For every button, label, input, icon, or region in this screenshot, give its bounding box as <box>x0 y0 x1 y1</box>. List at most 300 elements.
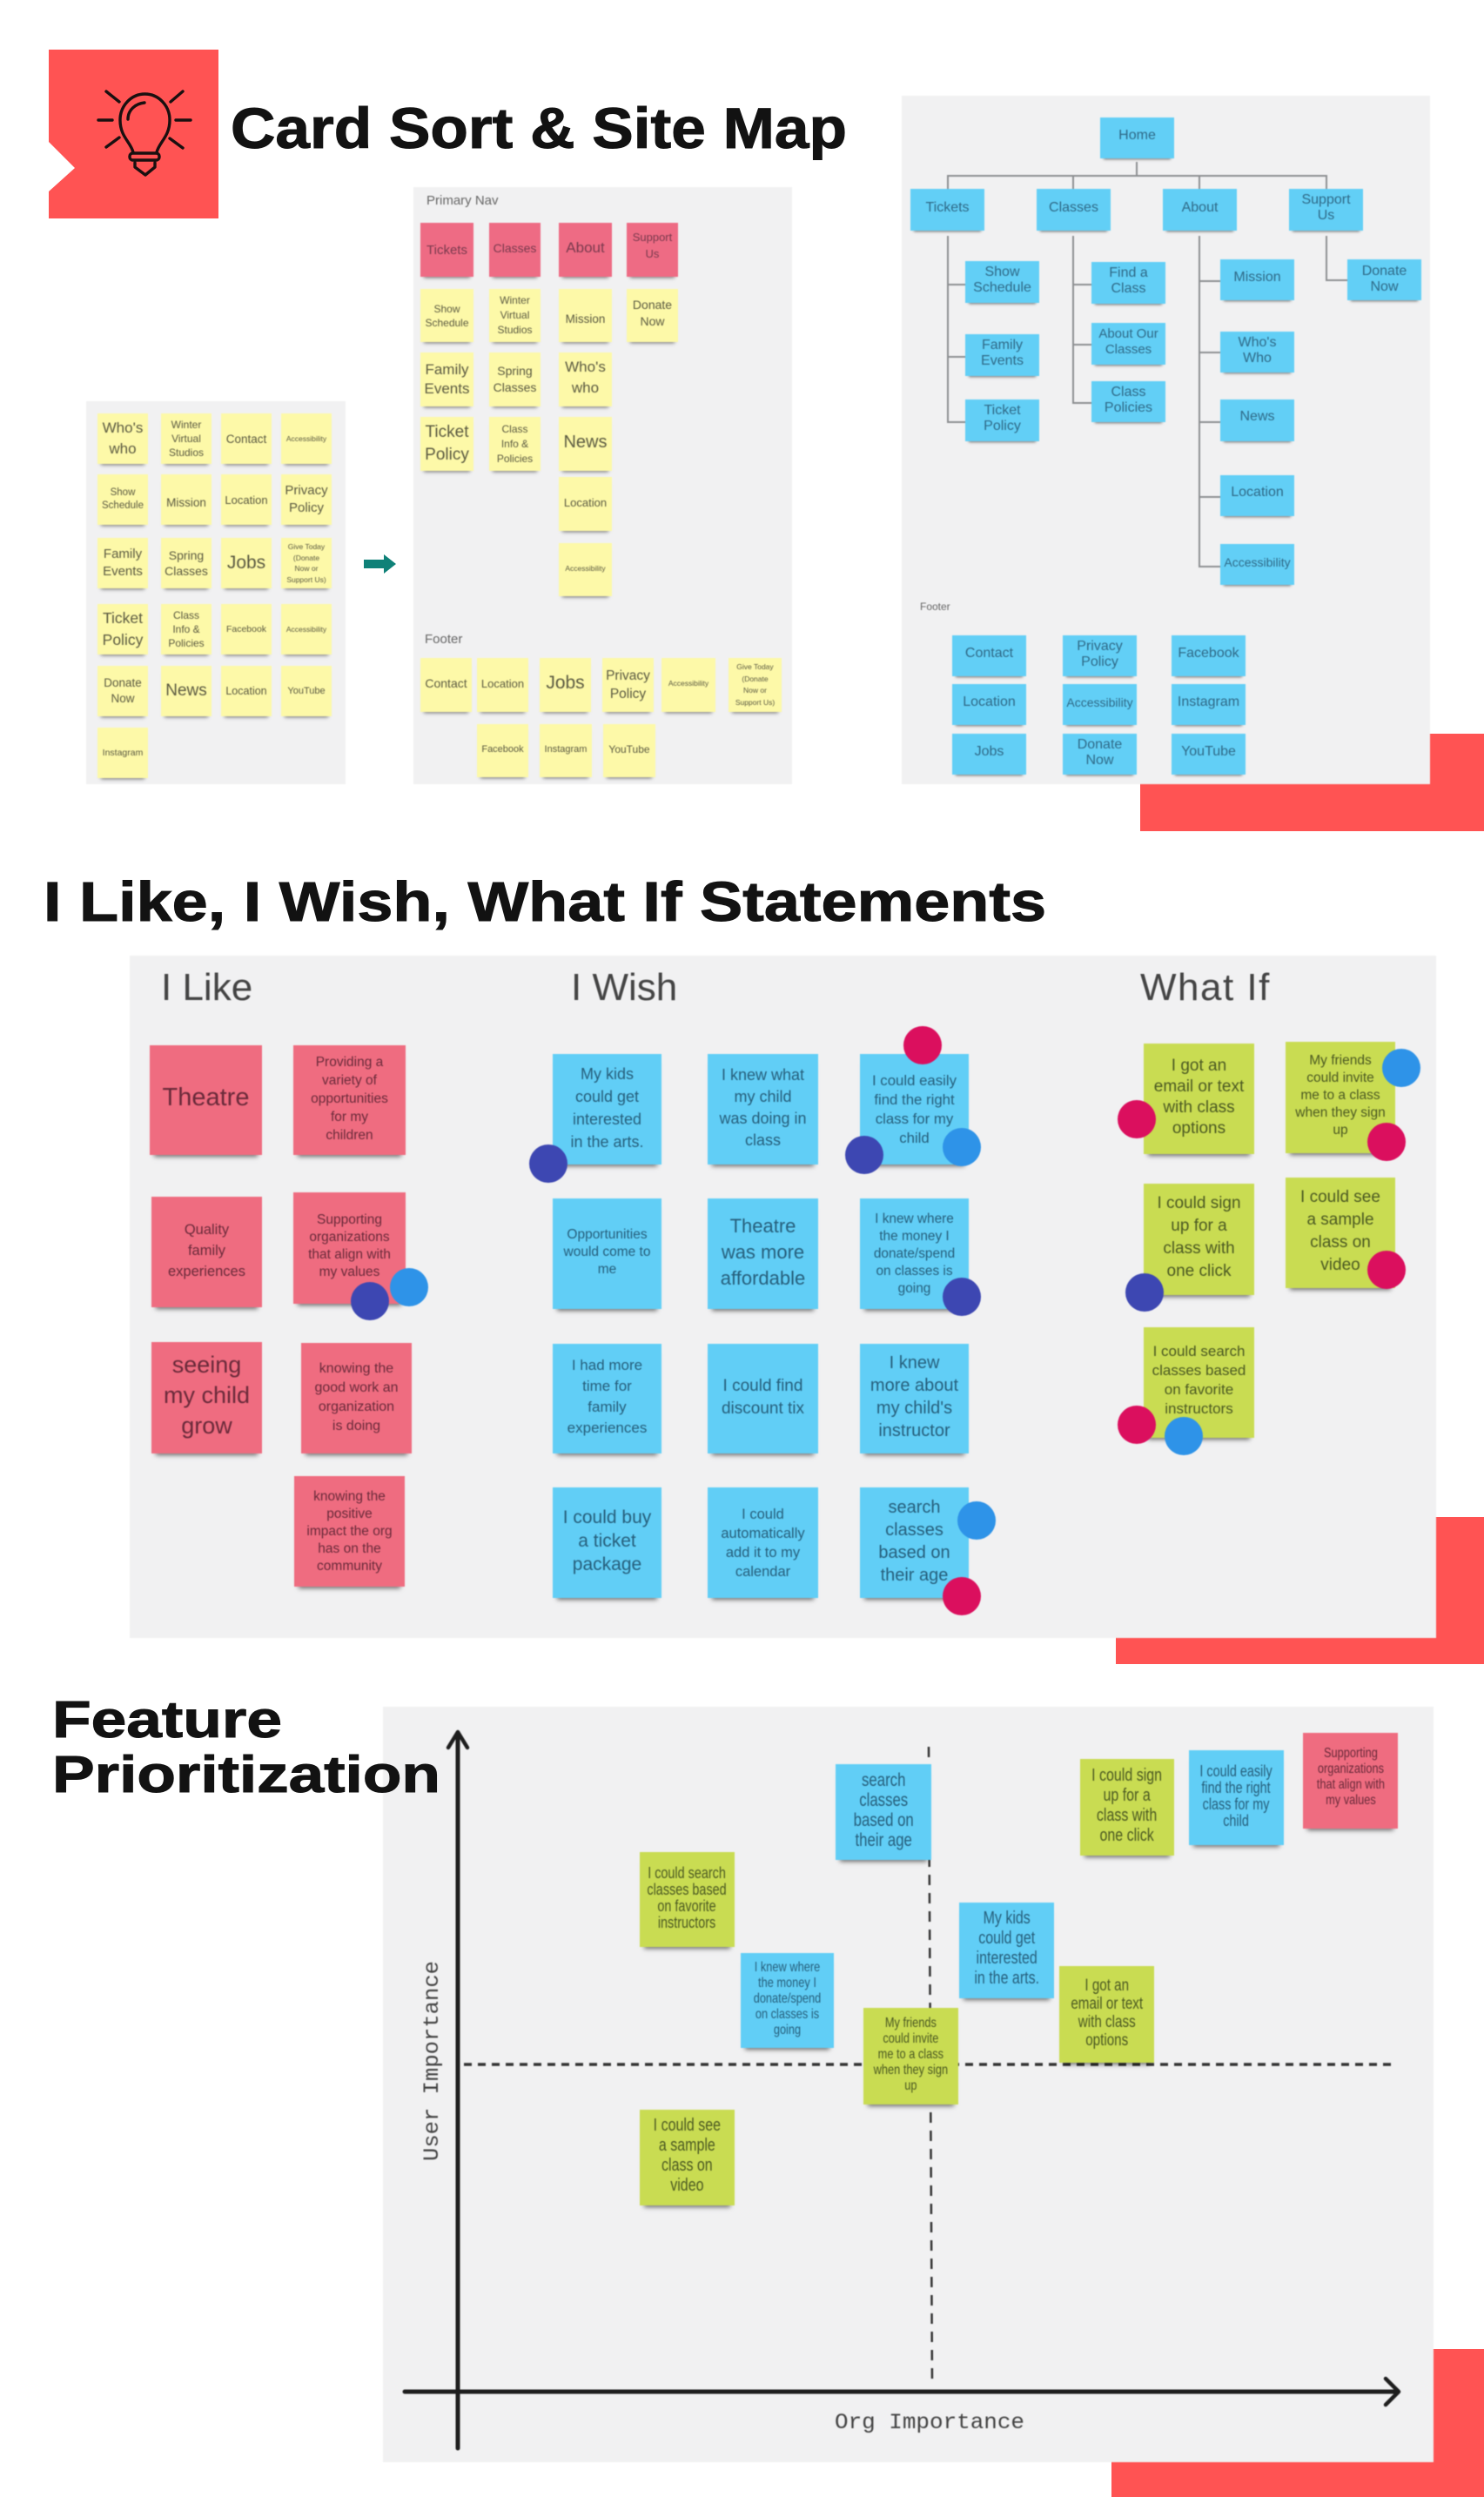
note: Opportunities: Opportunities <box>567 1227 648 1241</box>
note: automatically add: add it to my <box>726 1544 800 1560</box>
note: Donate Now <box>97 666 148 716</box>
note: sample class <box>640 2110 735 2205</box>
vote dot <box>390 1268 428 1306</box>
note: sign up one click: one click <box>1167 1262 1231 1280</box>
note: YouTube <box>603 724 655 777</box>
note: My kids: My kids <box>581 1065 634 1083</box>
note: my kids <box>959 1903 1054 1998</box>
note: Supporting organizations: organizations <box>309 1230 390 1245</box>
note: easily find: I could easily <box>1200 1762 1272 1779</box>
accent block: top section corner <box>1140 734 1484 831</box>
note: I could buy: a ticket <box>578 1531 636 1551</box>
note: Jobs: Jobs <box>227 553 265 573</box>
node: News <box>1220 399 1294 441</box>
note: supporting organizations: organizations <box>1317 1762 1384 1776</box>
note: Spring Classes <box>489 352 541 406</box>
note: Providing opportunities: variety of <box>322 1072 377 1088</box>
node: Show Schedule: Schedule <box>973 280 1031 295</box>
note: search classes: their age <box>855 1830 912 1850</box>
note: Ticket Policy: Ticket <box>103 609 143 627</box>
note: I knew where: donate/spend <box>874 1246 955 1260</box>
note: Spring Classes: Classes <box>494 380 536 394</box>
vote dot <box>1165 1417 1203 1455</box>
note: Show Schedule <box>97 474 148 525</box>
note: my kids: interested <box>976 1949 1037 1968</box>
note: Ticket Policy: Policy <box>103 631 143 648</box>
panel: sorted cards <box>413 187 792 784</box>
note: Accessibility: Accessibility <box>286 434 326 443</box>
note: I knew more: more about <box>870 1376 958 1395</box>
note: sign up one click: up for a <box>1171 1217 1227 1235</box>
note: My friends: when they sign <box>1295 1105 1386 1120</box>
note: Quality family experiences <box>151 1197 262 1307</box>
label: Primary Nav: Primary Nav <box>426 193 499 208</box>
note: my kids: could get <box>978 1929 1035 1948</box>
panel: site map <box>902 96 1430 784</box>
note: email or text: with class <box>1078 2012 1135 2031</box>
note: Opportunities: would come to <box>564 1245 650 1259</box>
note: I knew where: the money I <box>879 1229 950 1243</box>
note: search classes: search <box>862 1770 905 1790</box>
vote dot <box>957 1501 996 1540</box>
note: sample class: I could see <box>1300 1187 1380 1206</box>
note: I could easily <box>860 1054 969 1165</box>
note: Location: Location <box>481 677 524 689</box>
note: About: About <box>566 239 605 256</box>
note: Location second: Location <box>225 685 267 697</box>
note: I could buy: I could buy <box>563 1507 651 1527</box>
note: Spring Classes <box>161 538 212 588</box>
note: search classes <box>836 1764 931 1860</box>
note: email or text: I got an <box>1084 1976 1129 1995</box>
node: News: News <box>1239 409 1274 424</box>
node: Show Schedule <box>965 261 1039 303</box>
note: search favorite instructors: classes based <box>1152 1361 1246 1379</box>
node: About: About <box>1182 200 1218 215</box>
note: I had more time: family <box>588 1399 627 1415</box>
note: automatically add: I could <box>742 1506 784 1521</box>
note: My friends <box>1286 1042 1395 1153</box>
note: Ticket Policy: Ticket <box>426 423 468 441</box>
note: Winter Virtual Studios: Winter <box>500 294 530 306</box>
vote dot <box>943 1278 981 1316</box>
note: Family Events: Events <box>103 564 143 579</box>
note: YouTube <box>281 666 332 716</box>
panel: unsorted cards <box>86 401 346 784</box>
heading: What If: What If <box>1140 966 1271 1009</box>
note: email or text <box>1144 1044 1254 1154</box>
note: sign up <box>1080 1759 1174 1856</box>
note: Who's who: who <box>109 440 137 457</box>
heading: I Wish: I Wish <box>571 966 677 1009</box>
note: I had more time: time for <box>582 1378 632 1394</box>
note: I knew more: I knew <box>890 1353 939 1373</box>
note: my kids: My kids <box>983 1909 1031 1928</box>
note: search favorite instructors <box>1144 1327 1254 1438</box>
note: Family Events: Family <box>425 361 469 378</box>
note: My friends: up <box>1333 1123 1348 1138</box>
note: Who's who: Who's <box>103 420 143 436</box>
note: discount tix: I could find <box>723 1377 802 1395</box>
node: Jobs: Jobs <box>975 743 1004 759</box>
note: I had more time: I had more <box>572 1357 642 1373</box>
node: Instagram <box>1172 684 1246 725</box>
node: Facebook: Facebook <box>1178 646 1239 660</box>
node: Tickets: Tickets <box>925 200 970 215</box>
note: News <box>559 417 612 471</box>
note: Spring Classes: Spring <box>497 364 533 378</box>
note: my friends: could invite <box>883 2031 939 2045</box>
note: email or text: options <box>1085 2031 1128 2049</box>
node: Find a Class: Find a <box>1109 265 1148 280</box>
node: Privacy Policy: Policy <box>1081 654 1118 668</box>
note: Accessibility second <box>281 604 332 654</box>
note: Give Today: (Donate <box>742 674 769 682</box>
note: Mission <box>161 474 212 525</box>
note: sample class: video <box>670 2176 704 2195</box>
note: email or text <box>1059 1966 1154 2063</box>
note: Privacy Policy: Policy <box>610 687 646 701</box>
chart axes and quadrant lines <box>402 1729 1401 2451</box>
note: Accessibility second: Accessibility <box>286 625 326 634</box>
note: Winter Virtual Studios: Winter <box>171 419 201 431</box>
site map connectors <box>947 162 1347 567</box>
node: Find a Class: Class <box>1111 281 1145 296</box>
note: Contact <box>221 413 272 464</box>
note: Class Info & Policies: Class <box>501 423 527 435</box>
note: Instagram: Instagram <box>103 748 143 758</box>
note: sign up: one click <box>1100 1826 1154 1845</box>
note: News: News <box>165 681 207 700</box>
node: Family Events: Events <box>981 353 1024 368</box>
note: My kids: could get <box>575 1088 639 1105</box>
note: Family Events: Family <box>104 547 142 561</box>
note: seeing my child grow: seeing <box>172 1351 241 1377</box>
note: Privacy Policy: Privacy <box>285 483 328 498</box>
note: I knew where: I knew where <box>875 1212 954 1225</box>
note: knowing the positive impact: knowing the <box>313 1488 386 1504</box>
note: knew where: the money I <box>758 1976 816 1990</box>
note: Winter Virtual Studios: Studios <box>169 446 204 459</box>
node: Who's Who: Who <box>1243 350 1272 366</box>
note: easily find <box>1189 1750 1284 1845</box>
note: Mission: Mission <box>566 312 605 326</box>
note: Accessibility: Accessibility <box>565 564 606 573</box>
note: Family Events <box>420 352 473 406</box>
note: Mission: Mission <box>166 496 206 508</box>
note: Providing opportunities <box>293 1045 406 1155</box>
note: Class Info & Policies: Policies <box>168 637 205 649</box>
note: Support Us: Support <box>633 231 672 244</box>
note: easily find: class for my <box>1203 1795 1270 1812</box>
note: Winter Virtual Studios: Studios <box>497 324 533 336</box>
note: Who's who: who <box>572 379 599 396</box>
note: Theatre affordable: Theatre <box>730 1215 796 1236</box>
node: Donate Now: Now <box>1085 752 1114 768</box>
note: I knew where: going <box>898 1281 930 1295</box>
note: knowing the positive impact: positive <box>326 1506 373 1521</box>
node: Accessibility: Accessibility <box>1224 555 1291 569</box>
note: my friends <box>863 2008 958 2104</box>
note: Providing opportunities: children <box>326 1128 373 1142</box>
note: Donate Now: Donate <box>633 298 672 312</box>
note: automatically add <box>708 1487 818 1598</box>
note: Show Schedule: Show <box>433 303 460 315</box>
note: sign up one click <box>1144 1184 1254 1295</box>
note: Spring Classes: Spring <box>169 548 204 562</box>
heading: Feature Prioritization: Prioritization <box>52 1746 440 1803</box>
note: Donate Now <box>627 289 678 342</box>
note: About <box>559 223 612 277</box>
note: Supporting organizations: that align with <box>308 1247 391 1262</box>
note: email or text: I got an <box>1172 1057 1226 1074</box>
node: Contact <box>952 635 1026 676</box>
note: sample class: class on <box>661 2156 713 2175</box>
note: Location <box>221 474 272 525</box>
note: my friends: My friends <box>885 2016 937 2030</box>
note: knowing the good work: organization <box>319 1400 394 1413</box>
node: Who's Who <box>1220 332 1294 373</box>
note: Give Today <box>729 658 782 712</box>
node: Family Events <box>965 334 1039 376</box>
note: Who's who <box>97 413 148 464</box>
note: I knew what <box>708 1054 818 1165</box>
note: Location: Location <box>225 493 268 507</box>
note: knowing the good work: knowing the <box>319 1361 393 1375</box>
node: YouTube: YouTube <box>1181 743 1236 759</box>
vote dot <box>529 1144 567 1183</box>
note: My kids <box>553 1054 661 1165</box>
note: Class Info & Policies: Info & <box>501 437 528 449</box>
note: Accessibility <box>661 658 715 712</box>
note: Facebook: Facebook <box>481 743 524 754</box>
note: I knew more <box>860 1344 969 1453</box>
heading: Card Sort & Site Map: Card Sort & Site Map <box>231 96 847 160</box>
note: Theatre affordable <box>708 1198 818 1309</box>
note: Winter Virtual Studios <box>489 289 541 342</box>
note: Quality family experiences: family <box>188 1243 225 1259</box>
note: Location <box>559 477 612 531</box>
note: knowing the positive impact: community <box>317 1558 382 1574</box>
note: Donate Now: Now <box>640 313 665 327</box>
note: My friends: My friends <box>1309 1053 1372 1068</box>
note: My friends: me to a class <box>1300 1088 1380 1103</box>
note: sign up one click: I could sign <box>1157 1194 1241 1212</box>
node: About Our Classes: About Our <box>1098 326 1158 341</box>
note: search favorite instructors: I could search <box>1153 1342 1245 1359</box>
note: Instagram <box>540 724 592 777</box>
note: I knew what: was doing in <box>719 1109 807 1126</box>
note: search favorite: I could search <box>648 1864 726 1882</box>
note: Give Today: (Donate <box>293 554 319 562</box>
node: About Our Classes: Classes <box>1105 342 1152 357</box>
note: Donate Now: Now <box>111 692 134 705</box>
note: Class Info & Policies <box>161 604 212 654</box>
note: Supporting organizations: my values <box>319 1265 379 1279</box>
note: Location <box>477 658 528 712</box>
note: automatically add: automatically <box>721 1525 805 1540</box>
node: Ticket Policy: Policy <box>984 419 1021 433</box>
note: Show Schedule: Schedule <box>425 317 469 329</box>
note: my kids: in the arts. <box>974 1969 1039 1988</box>
node: Classes <box>1037 189 1111 231</box>
note: Providing opportunities: Providing a <box>316 1055 383 1069</box>
note: automatically add: calendar <box>735 1563 790 1579</box>
note: search favorite: instructors <box>658 1913 716 1930</box>
note: search classes: based on <box>878 1542 950 1561</box>
note: email or text: email or text <box>1071 1995 1143 2012</box>
note: discount tix <box>708 1344 818 1453</box>
note: seeing my child grow: grow <box>181 1412 232 1438</box>
note: Show Schedule: Schedule <box>102 500 144 511</box>
note: Winter Virtual Studios: Virtual <box>171 433 201 445</box>
vote dot <box>1367 1251 1406 1289</box>
node: Who's Who: Who's <box>1239 334 1276 350</box>
heading: I Like: I Like <box>161 966 252 1009</box>
heading: Feature Prioritization <box>52 1693 440 1803</box>
note: I could easily: I could easily <box>872 1072 957 1088</box>
note: sample class: a sample <box>659 2136 715 2155</box>
note: Spring Classes: Classes <box>165 564 208 578</box>
note: my friends: up <box>904 2078 917 2092</box>
node: Tickets <box>910 189 984 231</box>
note: Accessibility <box>559 543 612 596</box>
node: Donate Now: Donate <box>1362 263 1407 279</box>
note: search classes: classes <box>859 1790 908 1810</box>
note: seeing my child grow: my child <box>164 1382 250 1408</box>
vote dot <box>1125 1273 1164 1312</box>
node: Class Policies: Policies <box>1105 400 1152 414</box>
node: Jobs <box>952 734 1026 775</box>
note: I had more time: experiences <box>567 1420 647 1436</box>
node: About Our Classes <box>1091 323 1165 365</box>
note: email or text: email or text <box>1154 1077 1244 1095</box>
note: Opportunities: me <box>598 1262 616 1276</box>
note: Support Us <box>627 223 678 277</box>
note: sample class: video <box>1320 1255 1360 1274</box>
node: Family Events: Family <box>982 338 1023 352</box>
vote dot <box>943 1128 981 1166</box>
note: Supporting organizations: Supporting <box>317 1212 382 1227</box>
node: Privacy Policy: Privacy <box>1077 639 1123 653</box>
note: Theatre: Theatre <box>163 1083 249 1111</box>
note: sample class: a sample <box>1306 1210 1374 1229</box>
note: I could easily: class for my <box>876 1111 953 1126</box>
note: Ticket Policy <box>420 417 473 471</box>
note: Contact: Contact <box>226 432 266 446</box>
note: YouTube: YouTube <box>287 686 326 696</box>
node: Support Us <box>1289 189 1363 231</box>
node: Privacy Policy <box>1063 635 1137 676</box>
note: Privacy Policy <box>281 474 332 525</box>
node: Donate Now: Donate <box>1078 736 1122 752</box>
note: sample class <box>1286 1178 1395 1288</box>
note: Ticket Policy <box>97 604 148 654</box>
note: Give Today: Support Us) <box>286 574 326 583</box>
note: Show Schedule: Show <box>111 487 135 498</box>
note: sign up: I could sign <box>1092 1765 1162 1784</box>
note: Theatre affordable: was more <box>722 1241 804 1262</box>
note: knowing the positive impact <box>294 1476 405 1587</box>
note: Quality family experiences: Quality <box>185 1222 229 1238</box>
note: I could buy <box>553 1487 661 1598</box>
arrow: sorted direction <box>364 554 396 574</box>
note: Give Today: Support Us) <box>735 698 775 707</box>
note: supporting organizations: that align with <box>1316 1777 1385 1792</box>
node: Location: Location <box>963 695 1016 708</box>
icon: lightbulb on red ribbon <box>49 50 218 218</box>
note: News <box>161 666 212 716</box>
node: Class Policies: Class <box>1111 385 1145 399</box>
note: Tickets: Tickets <box>426 242 467 258</box>
note: discount tix: discount tix <box>722 1400 804 1418</box>
node: Accessibility <box>1063 684 1137 725</box>
vote dot <box>845 1136 883 1174</box>
note: I had more time <box>553 1344 661 1453</box>
note: I knew what: I knew what <box>722 1065 804 1083</box>
node: Support Us: Support <box>1301 192 1351 207</box>
note: knowing the good work: is doing <box>332 1419 380 1433</box>
note: Class Info & Policies: Policies <box>497 453 533 465</box>
node: Mission: Mission <box>1233 270 1281 284</box>
note: knowing the positive impact: has on the <box>318 1540 381 1556</box>
note: Facebook <box>477 724 528 777</box>
note: search classes: their age <box>881 1565 948 1584</box>
note: Class Info & Policies <box>489 417 541 471</box>
note: Class Info & Policies: Info & <box>172 623 200 635</box>
axis label: User Importance: User Importance <box>420 1961 445 2161</box>
note: Privacy Policy: Privacy <box>606 668 650 683</box>
note: sample class: I could see <box>654 2116 721 2135</box>
note: Privacy Policy: Policy <box>289 500 324 515</box>
node: Home: Home <box>1118 127 1156 143</box>
node: Accessibility: Accessibility <box>1066 695 1133 708</box>
note: Providing opportunities: opportunities <box>311 1091 388 1105</box>
note: Instagram <box>97 728 148 778</box>
note: Winter Virtual Studios: Virtual <box>500 309 529 321</box>
note: Who's who: Who's <box>565 359 606 375</box>
note: search classes: classes <box>885 1520 943 1539</box>
node: Donate Now <box>1347 259 1421 300</box>
note: sample class: class on <box>1310 1232 1371 1252</box>
note: Family Events: Events <box>425 380 469 397</box>
label: Footer: Footer <box>425 632 462 647</box>
node: Instagram: Instagram <box>1178 695 1239 708</box>
note: Theatre affordable: affordable <box>721 1267 805 1288</box>
note: my friends: when they sign <box>874 2063 948 2077</box>
note: Jobs <box>540 658 591 712</box>
note: News: News <box>563 432 608 451</box>
note: search favorite instructors: instructors <box>1165 1400 1233 1417</box>
note: I knew more: my child's <box>876 1399 952 1418</box>
note: I could buy: package <box>573 1554 641 1574</box>
vote dot <box>943 1577 981 1615</box>
node: YouTube <box>1172 734 1246 775</box>
note: search favorite: on favorite <box>658 1897 716 1915</box>
note: knowing the positive impact: impact the org <box>306 1523 393 1539</box>
note: knew where: going <box>774 2023 801 2037</box>
note: Theatre <box>150 1045 262 1155</box>
heading: I Like, I Wish, What If Statements: I Like, I Wish, What If Statements <box>44 870 1046 933</box>
node: Accessibility <box>1220 544 1294 585</box>
note: Facebook: Facebook <box>226 624 266 634</box>
note: Opportunities <box>553 1198 661 1309</box>
node: Donate Now <box>1063 734 1137 775</box>
node: Facebook <box>1172 635 1246 676</box>
note: email or text: with class <box>1163 1098 1235 1116</box>
note: my friends: me to a class <box>878 2047 943 2061</box>
node: Home <box>1100 117 1174 158</box>
